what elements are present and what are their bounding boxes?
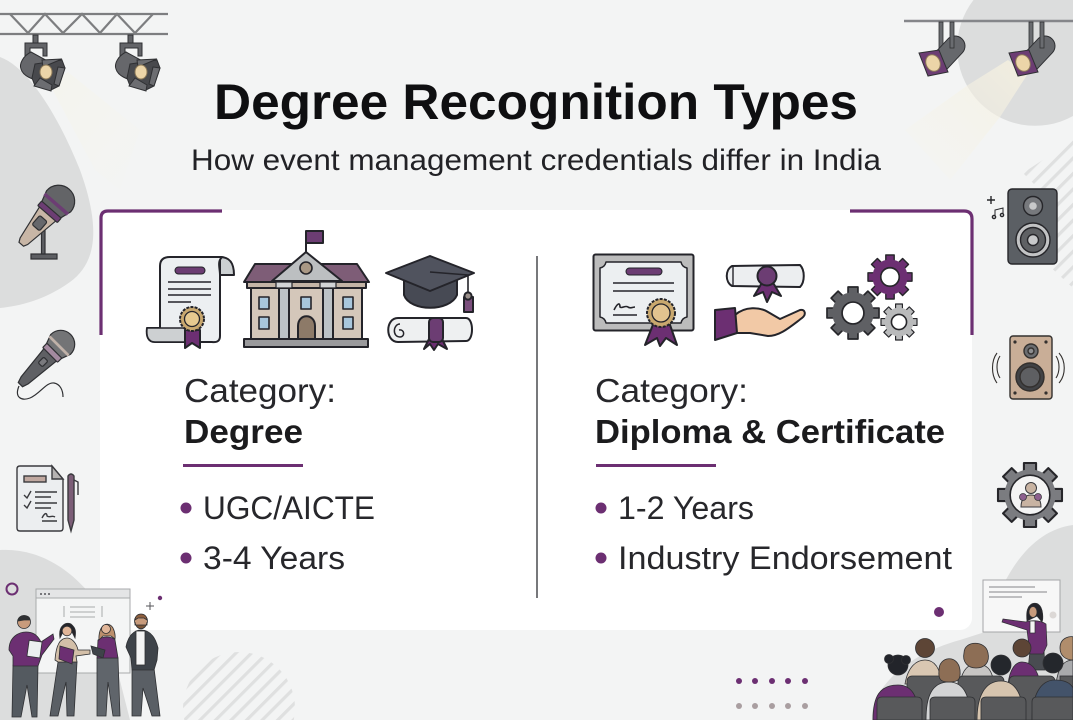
card bracket: left — [101, 211, 222, 335]
background blob: bottom left — [0, 550, 130, 720]
icon: graduation cap and diploma — [386, 256, 474, 350]
person: man with clipboard — [9, 616, 54, 717]
spotlight: right one — [919, 22, 955, 76]
text block: diploma category: Diploma & Certificate — [595, 413, 945, 450]
icon: checklist document and pen — [17, 466, 78, 531]
icon: microphone on stand — [9, 179, 81, 259]
person: woman with tablet — [91, 624, 120, 716]
bullet list: diploma: 1-2 Years — [618, 490, 754, 526]
light beam: left — [50, 72, 140, 190]
icon: gear with person — [998, 463, 1062, 527]
underline: degree — [183, 464, 303, 467]
icon: tan speaker with sound waves — [992, 336, 1064, 399]
hatched decoration: right — [1023, 140, 1073, 288]
icon: degree scroll — [147, 257, 234, 348]
icon: three gears — [827, 255, 917, 340]
bullet list: degree: UGC/AICTE — [203, 490, 375, 526]
hatched decoration: bottom circle — [183, 652, 295, 720]
title: Degree Recognition Types — [214, 74, 858, 130]
dot grid: bottom centre — [736, 678, 808, 709]
icon: university building — [244, 231, 369, 347]
spotlight: left one — [20, 35, 65, 91]
audience back chairs — [907, 676, 1073, 720]
bullet list: diploma — [596, 490, 952, 576]
presenter — [1002, 603, 1047, 670]
people: team group — [9, 614, 160, 717]
stage truss: left — [0, 14, 168, 34]
decorative dot on card — [934, 607, 944, 617]
text block: degree category: Category: — [184, 372, 336, 409]
underline: diploma — [596, 464, 716, 467]
spotlight: right two — [1009, 22, 1045, 76]
person: bearded man in jacket — [126, 614, 160, 716]
stage rail: right — [904, 20, 1073, 22]
background blob: top right — [957, 0, 1073, 126]
background blob: left — [0, 57, 93, 308]
bullet list: degree — [180, 490, 375, 576]
decoration: ring and sparkle dots left — [6, 584, 162, 610]
background blob: bottom right — [872, 525, 1073, 720]
icon: framed certificate — [594, 254, 694, 346]
light beams: right — [905, 60, 1027, 180]
text block: diploma category — [595, 372, 945, 450]
icon: handheld microphone with cable — [11, 324, 81, 399]
audience front row — [873, 653, 1073, 720]
bullet list: degree: 3-4 Years — [203, 540, 345, 576]
text block: degree category — [184, 372, 336, 450]
presentation screen: left — [36, 589, 130, 673]
bullet list: diploma: Industry Endorsement — [618, 540, 952, 576]
audience front chairs — [877, 697, 1073, 720]
icon: grey speaker with music note — [987, 189, 1057, 264]
text block: degree category: Degree — [184, 413, 303, 450]
audience back row — [905, 637, 1073, 684]
spotlight: left two — [115, 35, 160, 91]
icon: hand holding diploma — [715, 265, 805, 340]
text block: diploma category: Category: — [595, 372, 748, 409]
card bracket: right — [850, 211, 972, 335]
subtitle: How event management credentials differ in India — [191, 144, 881, 177]
person: woman in beige — [50, 623, 90, 716]
presentation screen: right — [983, 580, 1060, 632]
audience — [873, 637, 1073, 720]
column divider — [536, 256, 538, 598]
panel: main card — [100, 210, 972, 630]
